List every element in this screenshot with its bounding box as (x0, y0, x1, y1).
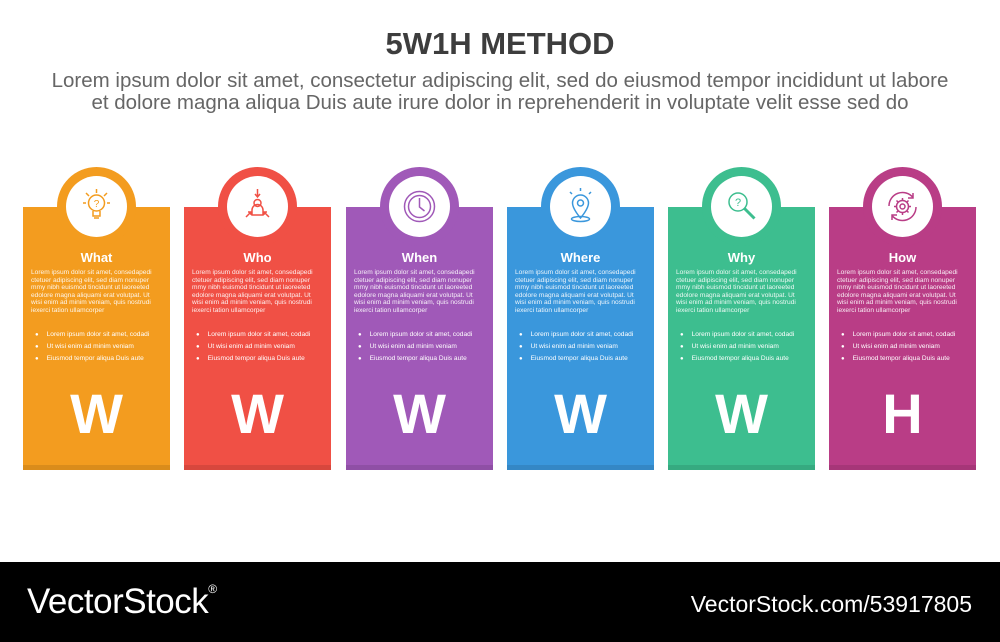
panel: when: mmy nibh euismod tincidunt ut laoreeted (354, 284, 472, 291)
panel: how: wisi enim ad minim veniam, quis nostrudi (837, 299, 957, 306)
subtitle (52, 69, 948, 114)
panel: how: mmy nibh euismod tincidunt ut laoreeted (837, 284, 955, 291)
panel: who: Eiusmod tempor aliqua Duis aute (208, 355, 305, 362)
panel: why (668, 167, 815, 470)
panel: where: Where (561, 250, 600, 265)
panel: why: Why (728, 250, 755, 265)
panel: when: edolore magna aliquami erat volutpat. Ut (354, 292, 473, 299)
panel: why: Eiusmod tempor aliqua Duis aute (692, 355, 789, 362)
panel: what: Lorem ipsum dolor sit amet, codadi (47, 331, 149, 338)
panel: when: iexerci tation ullamcorper (354, 307, 427, 314)
panel: where: ctetuer adipiscing elit, sed diam nonuper (515, 277, 633, 284)
panel: who: edolore magna aliquami erat volutpat. Ut (192, 292, 311, 299)
panel: where: iexerci tation ullamcorper (515, 307, 588, 314)
panel: when: wisi enim ad minim veniam, quis nostrudi (354, 299, 474, 306)
panel: why: Lorem ipsum dolor sit amet, codadi (692, 331, 794, 338)
panel: where: wisi enim ad minim veniam, quis nostrudi (515, 299, 635, 306)
panel: where: mmy nibh euismod tincidunt ut laoreeted (515, 284, 633, 291)
panel: where: Ut wisi enim ad minim veniam (531, 343, 618, 350)
icon: lightbulb (66, 176, 127, 237)
panel: when: Lorem ipsum dolor sit amet, consedapedi (354, 269, 475, 276)
panel: how: Ut wisi enim ad minim veniam (853, 343, 940, 350)
panel: who: mmy nibh euismod tincidunt ut laoreeted (192, 284, 310, 291)
panel: how: ctetuer adipiscing elit, sed diam nonuper (837, 277, 955, 284)
panel: why: ctetuer adipiscing elit, sed diam nonuper (676, 277, 794, 284)
icon: magnifier: ? (735, 197, 741, 209)
panel: where: edolore magna aliquami erat volutpat. Ut (515, 292, 634, 299)
panel: when: Eiusmod tempor aliqua Duis aute (370, 355, 467, 362)
panel: what: Ut wisi enim ad minim veniam (47, 343, 134, 350)
panel: why: Ut wisi enim ad minim veniam (692, 343, 779, 350)
panel: when: W (393, 382, 446, 445)
footer id: VectorStock.com/53917805 (691, 591, 972, 617)
panel: what: mmy nibh euismod tincidunt ut laoreeted (31, 284, 149, 291)
panel: how: How (889, 250, 916, 265)
panel: who (184, 167, 331, 470)
panel: why: Lorem ipsum dolor sit amet, consedapedi (676, 269, 797, 276)
panel: what: iexerci tation ullamcorper (31, 307, 104, 314)
panel: how: Lorem ipsum dolor sit amet, codadi (853, 331, 955, 338)
panel: who: W (231, 382, 284, 445)
panel: where: Lorem ipsum dolor sit amet, codadi (531, 331, 633, 338)
icon: lightbulb: ? (94, 199, 100, 210)
panel: what: What (81, 250, 112, 265)
title: 5W1H METHOD (385, 26, 615, 61)
panel: where: Lorem ipsum dolor sit amet, consedapedi (515, 269, 636, 276)
panel: who: Lorem ipsum dolor sit amet, codadi (208, 331, 310, 338)
panel: what (23, 167, 170, 470)
panel: who: Lorem ipsum dolor sit amet, consedapedi (192, 269, 313, 276)
icon: magnifier (711, 176, 772, 237)
footer logo: VectorStock® (27, 582, 217, 621)
panel: why: wisi enim ad minim veniam, quis nostrudi (676, 299, 796, 306)
panel: how: Eiusmod tempor aliqua Duis aute (853, 355, 950, 362)
footer bar (0, 562, 1000, 642)
panel: who: Who (243, 250, 272, 265)
panel: when: ctetuer adipiscing elit, sed diam nonuper (354, 277, 472, 284)
panel: who: Ut wisi enim ad minim veniam (208, 343, 295, 350)
icon: location pin (550, 176, 611, 237)
panel: why: W (715, 382, 768, 445)
panel: why: mmy nibh euismod tincidunt ut laoreeted (676, 284, 794, 291)
icon: clock (389, 176, 450, 237)
panel: how: H (882, 382, 923, 445)
panel: how (829, 167, 976, 470)
panel: what: ctetuer adipiscing elit, sed diam nonuper (31, 277, 149, 284)
panel: when (346, 167, 493, 470)
panel: what: edolore magna aliquami erat volutpat. Ut (31, 292, 150, 299)
panel: who: iexerci tation ullamcorper (192, 307, 265, 314)
subtitle: Lorem ipsum dolor sit amet, consectetur adipiscing elit, sed do eiusmod tempor incididunt ut labore (52, 69, 948, 92)
panel: when: Lorem ipsum dolor sit amet, codadi (370, 331, 472, 338)
panel: who: ctetuer adipiscing elit, sed diam nonuper (192, 277, 310, 284)
panel: where: W (554, 382, 607, 445)
panel: what: Lorem ipsum dolor sit amet, consedapedi (31, 269, 152, 276)
panel: what: Eiusmod tempor aliqua Duis aute (47, 355, 144, 362)
panel: why: iexerci tation ullamcorper (676, 307, 749, 314)
panel: how: edolore magna aliquami erat volutpat. Ut (837, 292, 956, 299)
panel: what: wisi enim ad minim veniam, quis nostrudi (31, 299, 151, 306)
panel: where (507, 167, 654, 470)
panel: what: W (70, 382, 123, 445)
panel: when: Ut wisi enim ad minim veniam (370, 343, 457, 350)
panel: why: edolore magna aliquami erat volutpat. Ut (676, 292, 795, 299)
panel: where: Eiusmod tempor aliqua Duis aute (531, 355, 628, 362)
icon: gear cycle (872, 176, 933, 237)
panel: how: Lorem ipsum dolor sit amet, consedapedi (837, 269, 958, 276)
panel: when: When (402, 250, 437, 265)
subtitle: et dolore magna aliqua Duis aute irure dolor in reprehenderit in voluptate velit esse sed do (91, 91, 909, 114)
panel: how: iexerci tation ullamcorper (837, 307, 910, 314)
panel: who: wisi enim ad minim veniam, quis nostrudi (192, 299, 312, 306)
icon: person (227, 176, 288, 237)
